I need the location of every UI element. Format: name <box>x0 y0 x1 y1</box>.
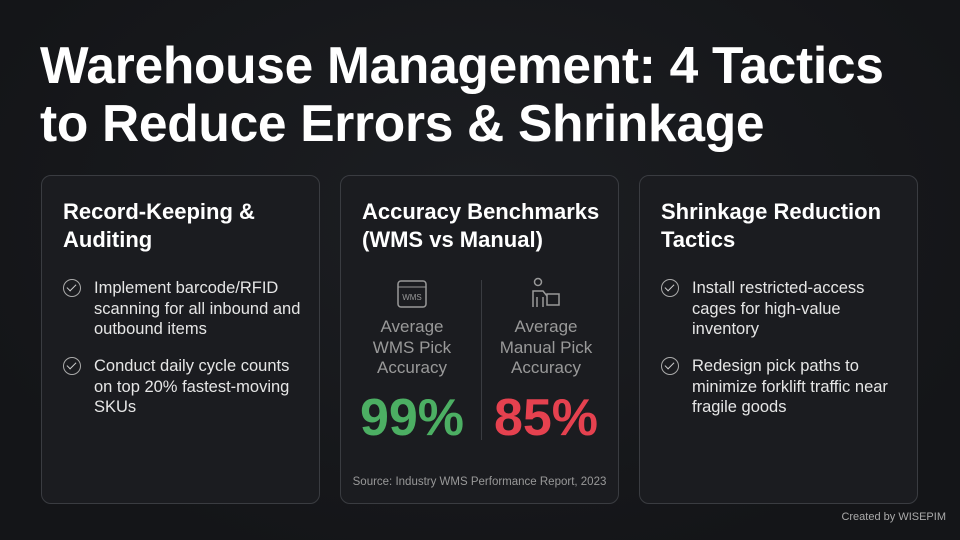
heading <box>661 199 881 252</box>
heading: Shrinkage Reduction <box>661 199 881 224</box>
bullet 1: Install restricted-access cages for high-value inventory <box>692 279 864 338</box>
bullet 1: Implement barcode/RFID scanning for all inbound and outbound items <box>94 279 300 338</box>
heading: Tactics <box>661 227 735 252</box>
heading: Accuracy Benchmarks <box>362 199 599 224</box>
label manual: Average Manual Pick Accuracy <box>500 317 592 377</box>
heading <box>362 199 599 252</box>
title: to Reduce Errors & Shrinkage <box>40 94 764 152</box>
stat 99: 99% <box>360 389 464 447</box>
bullet 2: Redesign pick paths to minimize forklift traffic near fragile goods <box>692 357 888 416</box>
stat 85: 85% <box>494 389 598 447</box>
icon: manual picker <box>532 278 560 307</box>
heading: (WMS vs Manual) <box>362 227 543 252</box>
footer credit: Created by WISEPIM <box>841 511 946 523</box>
heading: Auditing <box>63 227 152 252</box>
icon: wms: WMS <box>402 293 422 302</box>
heading <box>63 199 255 252</box>
heading: Record-Keeping & <box>63 199 255 224</box>
panel: record-keeping <box>41 175 320 504</box>
panel: benchmarks <box>340 175 619 504</box>
label wms: Average WMS Pick Accuracy <box>373 317 451 377</box>
icon: wms <box>397 280 427 308</box>
title <box>40 36 884 152</box>
title: Warehouse Management: 4 Tactics <box>40 36 884 94</box>
bullet 2: Conduct daily cycle counts on top 20% fastest-moving SKUs <box>94 357 289 416</box>
source: Source: Industry WMS Performance Report, 2023 <box>353 476 606 488</box>
panel: shrinkage <box>639 175 918 504</box>
